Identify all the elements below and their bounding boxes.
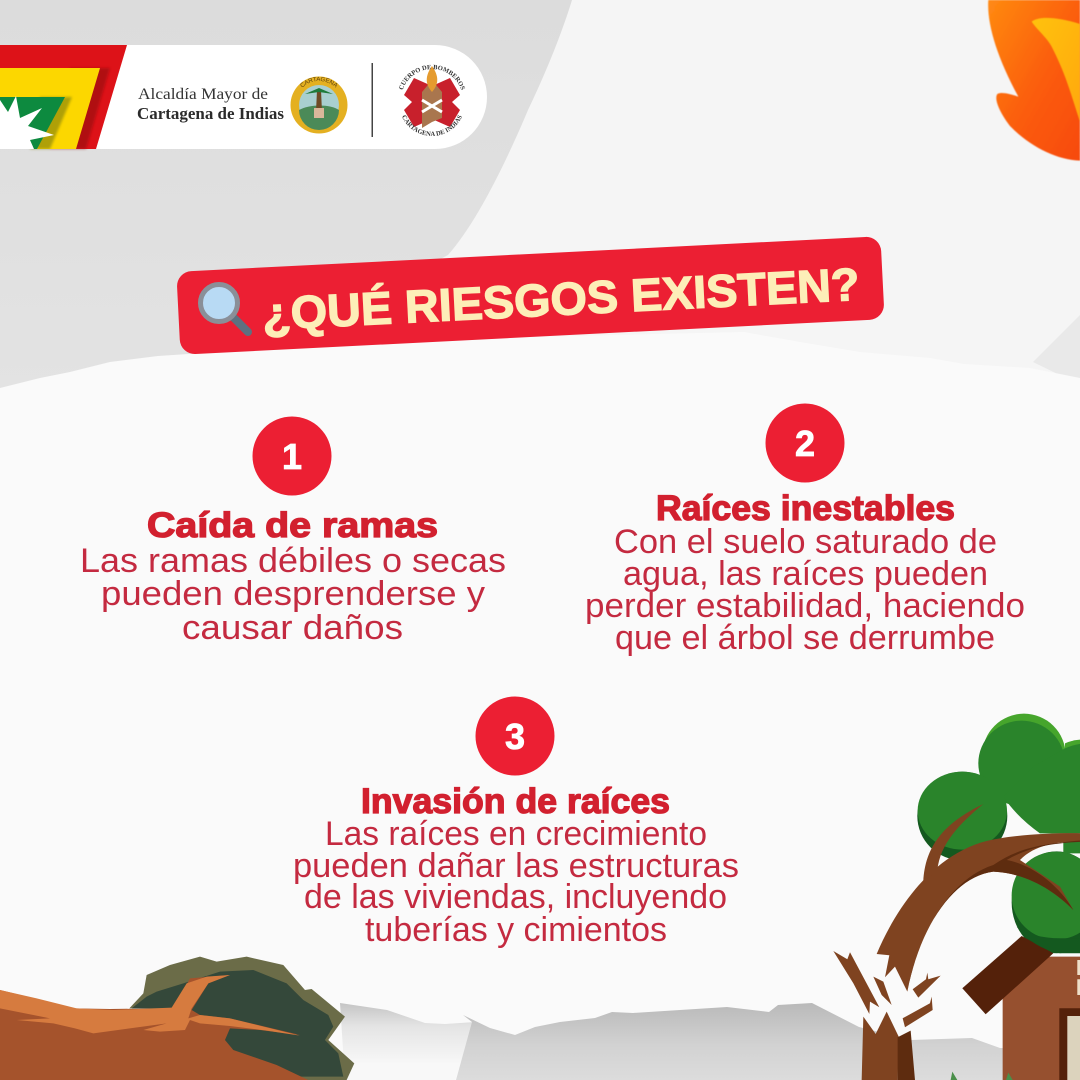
flag mark [0, 45, 127, 149]
risk 1 [80, 416, 506, 647]
white pill [0, 45, 487, 149]
text: Cartagena de Indias: Cartagena de Indias [137, 104, 284, 123]
firefighters emblem: CARTAGENA DE INDIAS [402, 115, 462, 136]
logo bar [0, 45, 487, 151]
risk 3 [293, 696, 739, 949]
title banner [176, 236, 885, 355]
risk 2 description: agua, las raíces pueden [623, 555, 988, 593]
risk 2 description: perder estabilidad, haciendo [585, 587, 1025, 625]
text: Alcaldía: Alcaldía Mayor de [138, 86, 268, 103]
trunk [0, 975, 308, 1080]
red banner [176, 236, 885, 355]
house [962, 927, 1080, 1080]
risk 3 description: pueden dañar las estructuras [293, 847, 739, 885]
trunk and branches [877, 804, 1080, 992]
seal of Cartagena [290, 76, 348, 134]
trunk highlights [0, 975, 300, 1036]
risk 2 description [585, 523, 1025, 657]
risk 1 description [80, 542, 506, 647]
flame illustration [988, 0, 1080, 161]
broken stump and splinters [833, 951, 941, 1080]
number badge 2 [766, 404, 844, 482]
number badge 1: 1 [282, 436, 302, 477]
foliage [917, 714, 1080, 953]
risk 1 description: pueden desprenderse y [101, 575, 485, 613]
illustration: fallen trunk and rock [0, 957, 354, 1080]
risk 3 description: tuberías y cimientos [365, 911, 667, 949]
heading: ¿QUÉ RIESGOS EXISTEN? [261, 258, 861, 340]
risk 3 heading: Invasión de raíces [361, 782, 670, 821]
risk 2 [585, 404, 1025, 657]
number badge 3: 3 [505, 716, 525, 757]
grass tips [951, 1072, 1013, 1080]
number badge 1 [252, 416, 332, 496]
divider [372, 63, 373, 137]
risk 2 heading: Raíces inestables [656, 489, 955, 528]
background: light grey corner, right [1033, 315, 1080, 385]
risk 2 description: que el árbol se derrumbe [615, 619, 995, 657]
background: grey torn paper, bottom [340, 1003, 1080, 1080]
background: white torn paper [0, 332, 1080, 1080]
firefighters emblem: CUERPO DE BOMBEROS [399, 64, 466, 90]
risk 3 description: de las viviendas, incluyendo [304, 878, 727, 916]
risk 3 description [293, 815, 739, 949]
number badge 2: 2 [795, 423, 815, 464]
background: grey paper, upper left [0, 0, 572, 392]
seal of Cartagena: CARTAGENA [300, 76, 338, 88]
illustration: broken tree and house [833, 714, 1080, 1080]
firefighters emblem [399, 64, 466, 136]
risk 1 heading: Caída de ramas [147, 506, 438, 545]
icon: magnifying glass [200, 284, 248, 332]
rock [129, 957, 354, 1080]
risk 2 description: Con el suelo saturado de [614, 523, 997, 561]
risk 1 description: Las ramas débiles o secas [80, 542, 506, 580]
risk 3 description: Las raíces en crecimiento [325, 815, 707, 853]
risk 1 description: causar daños [182, 609, 403, 647]
number badge 3 [476, 696, 554, 776]
